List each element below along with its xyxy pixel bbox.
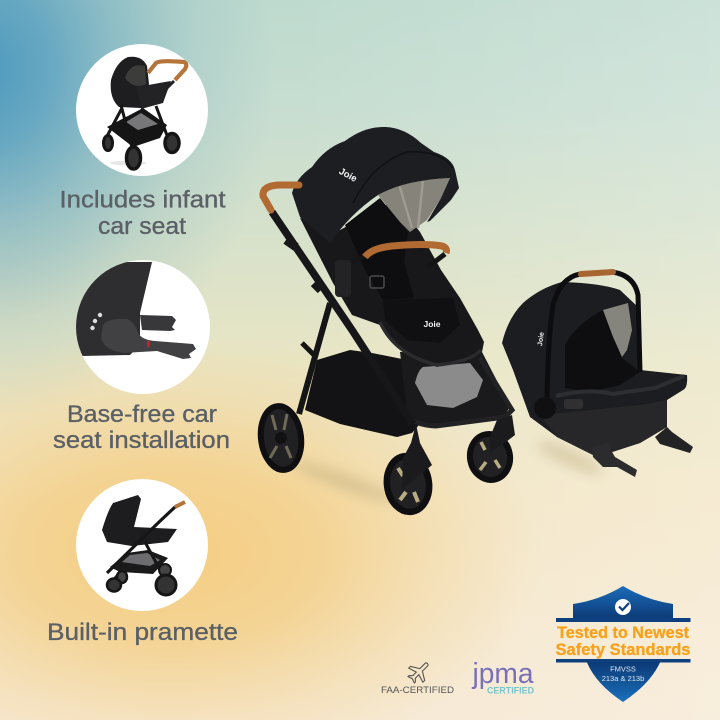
canopy window (378, 178, 450, 232)
frame joints (286, 240, 321, 290)
heading: includes infant car seat: Includes infant (60, 186, 226, 214)
top bar (556, 618, 690, 622)
rear foot (655, 427, 693, 453)
shell rim (556, 376, 684, 396)
front wheel (383, 424, 433, 515)
main frame (272, 212, 413, 424)
handlebar (263, 185, 299, 210)
panel: pramette feature (47, 479, 238, 646)
badge heading: Tested to Newest (557, 623, 689, 642)
footrest rim (380, 322, 481, 365)
subheading: car seat: car seat (98, 213, 186, 240)
front foot (592, 443, 637, 477)
canopy window (603, 303, 632, 357)
illustration: main stroller (257, 127, 515, 515)
shield top (573, 586, 673, 619)
badge heading line 2: Safety Standards (556, 640, 690, 659)
certification: FAA (381, 656, 454, 696)
icon: stroller with pramette in white circle (76, 479, 208, 611)
panel: infant car seat feature (60, 44, 226, 214)
safety badge (556, 586, 690, 702)
jpma wordmark: jpma (472, 658, 534, 690)
FAA label: FAA-CERTIFIED (381, 685, 454, 696)
seat pad (383, 298, 460, 343)
release button (564, 399, 583, 409)
seat tray and grey mesh (400, 352, 510, 428)
canopy (292, 127, 459, 243)
seat back cushion (345, 198, 414, 300)
brand: Joie on car seat: Joie (537, 332, 546, 346)
bottom bar (556, 659, 690, 662)
handle pivot (534, 397, 556, 419)
illustration: infant car seat (502, 272, 693, 480)
leg peg (302, 343, 314, 355)
rear leg (299, 303, 330, 414)
rear wheel (257, 404, 305, 472)
icon: stroller with car seat in white circle (76, 44, 208, 176)
shield bottom (587, 662, 660, 702)
brand: Joie on seat pad: Joie (423, 319, 441, 329)
basket (305, 350, 445, 437)
seat opening and cushion (565, 310, 640, 392)
JPMA certified label: CERTIFIED (487, 686, 534, 696)
bumper arm (352, 254, 445, 267)
heading: built-in pramette: Built-in pramette (47, 619, 238, 646)
icon: car seat load leg in white circle (76, 260, 210, 394)
standard numbers: 213a & 213b (602, 674, 644, 683)
icon: airplane (404, 656, 435, 687)
seat body (300, 200, 484, 367)
panel: base-free installation feature (60, 260, 217, 428)
seat side adjuster (335, 260, 351, 297)
ground shadow (291, 456, 399, 508)
carry handle (547, 272, 640, 398)
bumper bar (365, 244, 446, 257)
seat silhouette (502, 282, 687, 457)
rear wheel (104, 136, 112, 150)
certification: JPMA (472, 658, 534, 696)
harness buckle (370, 276, 384, 288)
base (540, 400, 667, 457)
check icon (615, 599, 631, 615)
car seat shadow (534, 436, 606, 480)
rear-side front wheel (466, 415, 515, 483)
standard text: FMVSS (610, 664, 636, 674)
brand: Joie on canopy: Joie (337, 166, 359, 185)
heading: base-free car seat installation: Base-free car (67, 401, 217, 428)
subheading: seat installation: seat installation (53, 427, 230, 454)
